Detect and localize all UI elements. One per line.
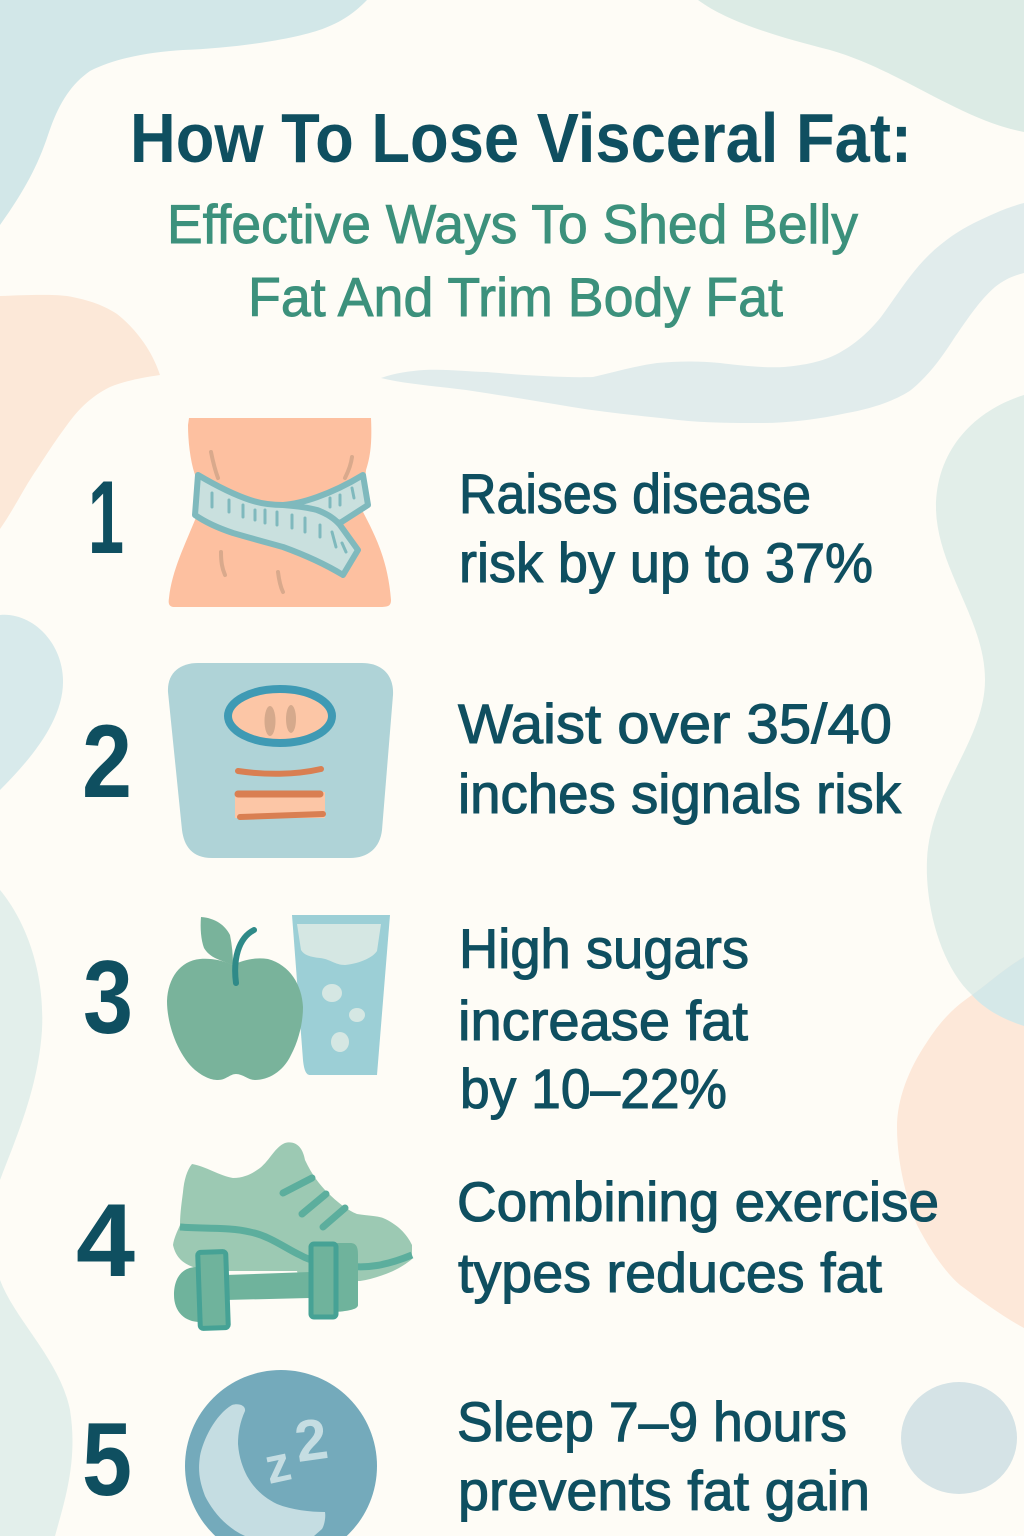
icon: shoe and dumbbell bbox=[173, 1142, 412, 1328]
text: Sleep 7–9 hours bbox=[457, 1390, 847, 1453]
subtitle: Fat And Trim Body Fat bbox=[248, 266, 783, 328]
icon: scale bbox=[168, 663, 393, 858]
text bbox=[457, 1390, 870, 1522]
text: risk by up to 37% bbox=[459, 531, 873, 594]
number 3: 3 bbox=[83, 940, 133, 1056]
icon: moon and zzz: 2 bbox=[291, 1406, 332, 1475]
icon: waist with measuring tape bbox=[169, 418, 391, 607]
subtitle bbox=[167, 193, 858, 328]
item 1: disease risk bbox=[88, 418, 873, 607]
text: prevents fat gain bbox=[458, 1459, 870, 1522]
text: Waist over 35/40 bbox=[458, 692, 892, 755]
text bbox=[458, 917, 749, 1120]
item 2: waist size bbox=[82, 663, 902, 858]
icon: moon and zzz: z bbox=[260, 1435, 296, 1495]
number 5: 5 bbox=[82, 1402, 132, 1518]
number 4: 4 bbox=[76, 1183, 135, 1299]
item 3: sugars bbox=[83, 915, 749, 1120]
number 1: 1 bbox=[88, 460, 124, 576]
text: Combining exercise bbox=[457, 1170, 939, 1233]
number 2: 2 bbox=[82, 704, 132, 820]
text: increase fat bbox=[458, 989, 748, 1052]
icon: moon and zzz bbox=[185, 1370, 377, 1536]
icon: apple and glass bbox=[167, 915, 390, 1080]
subtitle: Effective Ways To Shed Belly bbox=[167, 193, 858, 255]
text: by 10–22% bbox=[460, 1057, 727, 1120]
title: How To Lose Visceral Fat: bbox=[130, 99, 912, 177]
text bbox=[457, 1170, 939, 1304]
text bbox=[459, 462, 873, 594]
title bbox=[130, 99, 912, 328]
item 4: exercise bbox=[76, 1142, 939, 1328]
text: inches signals risk bbox=[458, 762, 902, 825]
text bbox=[458, 692, 902, 825]
text: Raises disease bbox=[459, 462, 811, 525]
text: types reduces fat bbox=[458, 1241, 882, 1304]
item 5: sleep bbox=[82, 1370, 870, 1536]
text: High sugars bbox=[459, 917, 749, 980]
